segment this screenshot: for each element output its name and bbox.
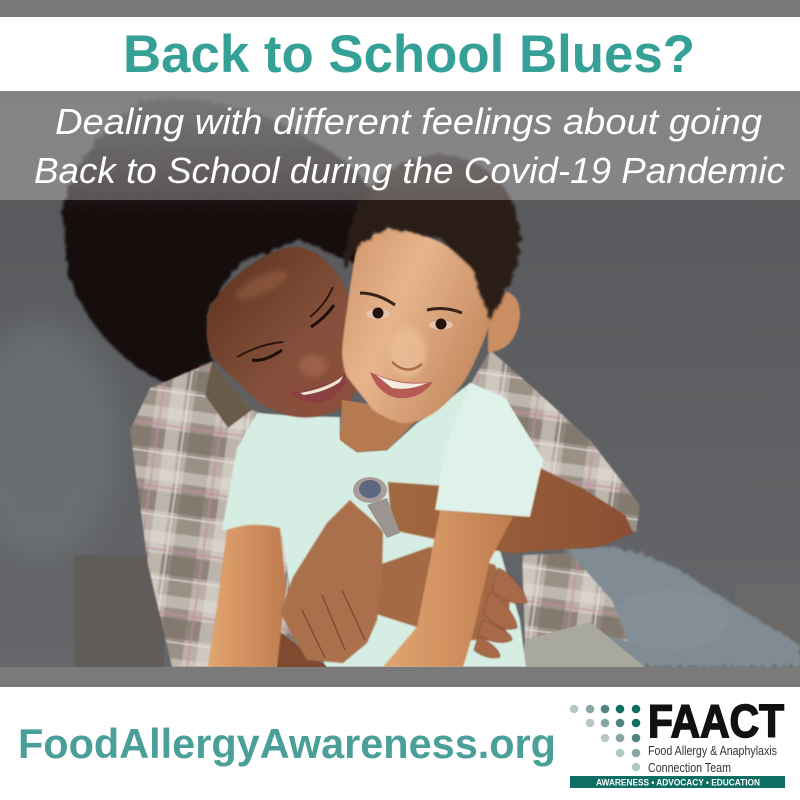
- mother's upper arm: [388, 468, 633, 553]
- logo tagline bar: AWARENESS • ADVOCACY • EDUCATION: [596, 778, 760, 788]
- mother's hand: [280, 500, 383, 663]
- translucent subtitle band: [0, 91, 800, 200]
- website address: FoodAllergyAwareness.org: [18, 720, 556, 767]
- mother's forearm: [373, 547, 510, 640]
- boy's t-shirt: [222, 383, 543, 667]
- boy's ear: [488, 292, 520, 352]
- subtitle: Back to School during the Covid-19 Pandemic: [34, 150, 785, 191]
- logo tagline bar: [570, 776, 785, 788]
- boy's face: [342, 228, 490, 423]
- skin behind boy's left arm: [277, 630, 327, 667]
- finger creases: [302, 590, 365, 658]
- photo: mother hugging son: [0, 91, 800, 667]
- boy's hair: [345, 155, 520, 320]
- logo organisation name: [648, 743, 777, 775]
- logo wordmark: FAACT: [648, 695, 784, 747]
- title: Back to School Blues?: [123, 25, 695, 84]
- boy's sleeve: [435, 383, 543, 517]
- top grey band: [0, 0, 800, 17]
- mother's hair: [62, 98, 375, 385]
- wristwatch: [353, 477, 400, 538]
- logo dot matrix: [570, 705, 640, 771]
- subtitle: [34, 101, 785, 191]
- bottom grey band: [0, 667, 800, 687]
- sofa: [74, 555, 800, 667]
- mother's plaid shirt: [130, 350, 640, 667]
- title bar: [0, 17, 800, 91]
- mother's trousers: [522, 622, 645, 667]
- mother's fingers: [474, 568, 527, 658]
- boy's arms: [208, 510, 513, 667]
- mother's face: [207, 247, 357, 417]
- photo background wall: [0, 91, 800, 667]
- fluffy blanket: [565, 546, 800, 667]
- boy's neck: [340, 400, 425, 452]
- logo organisation name: Connection Team: [648, 760, 731, 775]
- FAACT logo: [570, 695, 785, 788]
- subtitle: Dealing with different feelings about going: [55, 101, 762, 142]
